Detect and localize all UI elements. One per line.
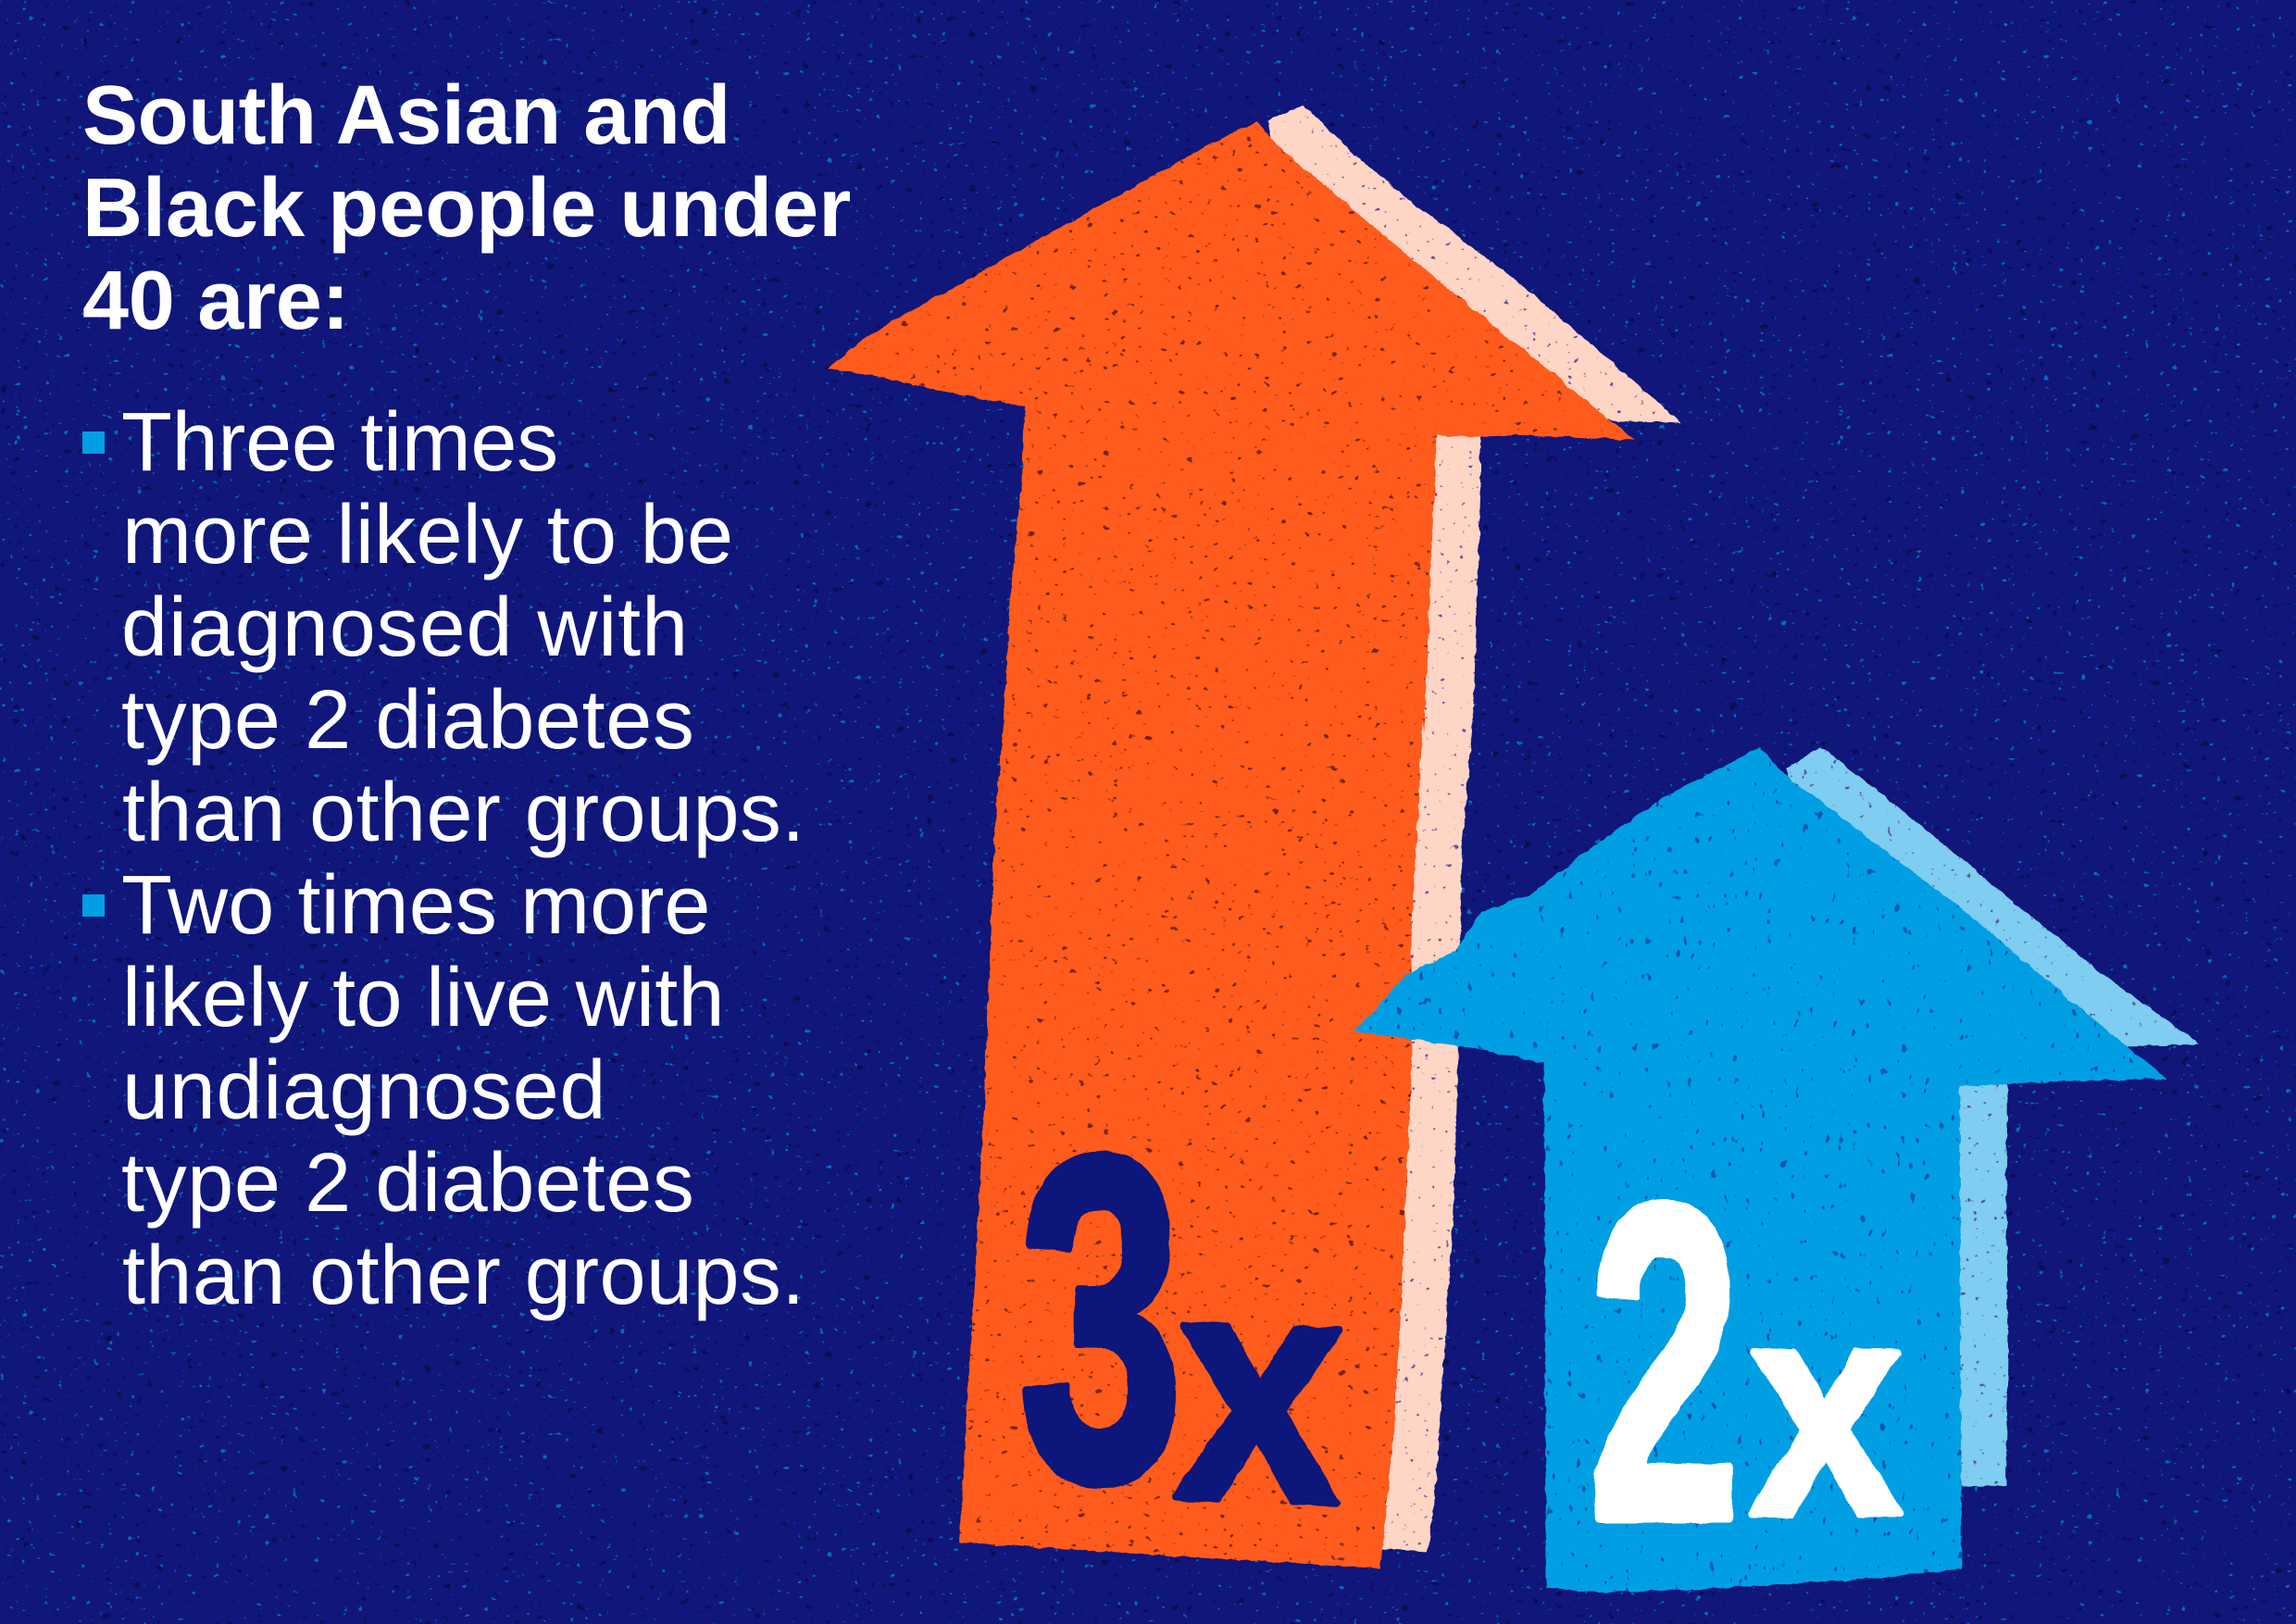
heading: 40 are: (82, 255, 349, 347)
label: 2x (1588, 1112, 1904, 1615)
bullet: three times (82, 396, 805, 859)
arrow body: orange (829, 121, 1634, 1568)
heading: Black people under (82, 162, 851, 255)
arrow shadow: peach (1268, 105, 1681, 1552)
bullet: two times: than other groups. (122, 1230, 805, 1322)
arrow body: blue (1354, 747, 2167, 1593)
bullet: two times (82, 859, 805, 1322)
heading: South Asian and (82, 69, 730, 162)
label: 3x: x (1169, 1202, 1352, 1572)
bullet: two times: undiagnosed (122, 1044, 606, 1137)
label: 3x (1018, 1059, 1352, 1577)
bullet: three times: more likely to be (122, 489, 733, 581)
bullet: two times: Two times more (121, 859, 711, 952)
orange arrow: 3x (829, 105, 1681, 1577)
label: 2x: 2 (1588, 1112, 1741, 1615)
bullet list (82, 396, 805, 1322)
heading (82, 69, 851, 347)
bullet: two times: type 2 diabetes (121, 1137, 694, 1230)
arrow shadow: light blue (1786, 746, 2200, 1487)
bullet: three times: diagnosed with (121, 581, 689, 674)
bullet: three times: Three times (121, 396, 558, 489)
blue arrow: 2x (1354, 746, 2200, 1615)
bullet: three times: than other groups. (122, 767, 805, 859)
label: 2x: x (1749, 1236, 1904, 1579)
bullet: three times: type 2 diabetes (121, 674, 694, 767)
label: 3x: 3 (1018, 1059, 1183, 1577)
bullet: two times: likely to live with (122, 952, 725, 1044)
